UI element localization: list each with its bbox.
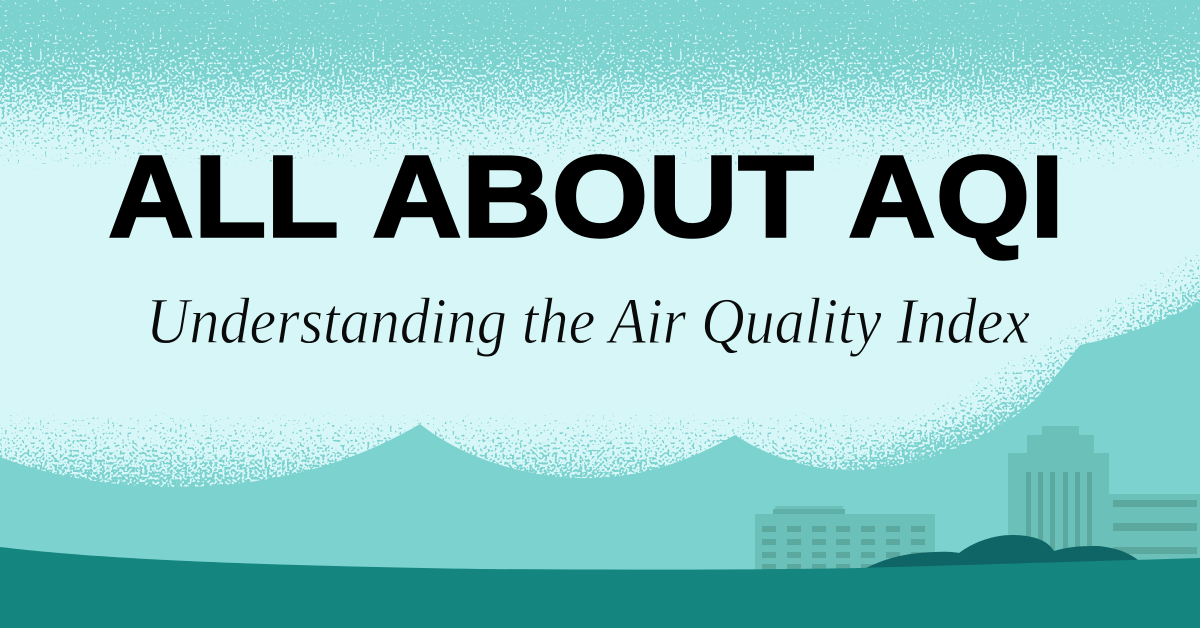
building: left office block bbox=[755, 506, 935, 570]
subtitle: Understanding the Air Quality Index bbox=[146, 285, 1030, 358]
title: ABOUT bbox=[372, 132, 814, 262]
foreground ground bbox=[0, 547, 1200, 628]
title: ALL bbox=[108, 132, 339, 262]
bushes bbox=[862, 535, 1142, 572]
building: right low block bbox=[1109, 494, 1200, 564]
building: stepped tower bbox=[1008, 426, 1109, 563]
title bbox=[108, 132, 1064, 262]
background hills bbox=[0, 302, 1200, 628]
title: AQI bbox=[848, 132, 1064, 262]
